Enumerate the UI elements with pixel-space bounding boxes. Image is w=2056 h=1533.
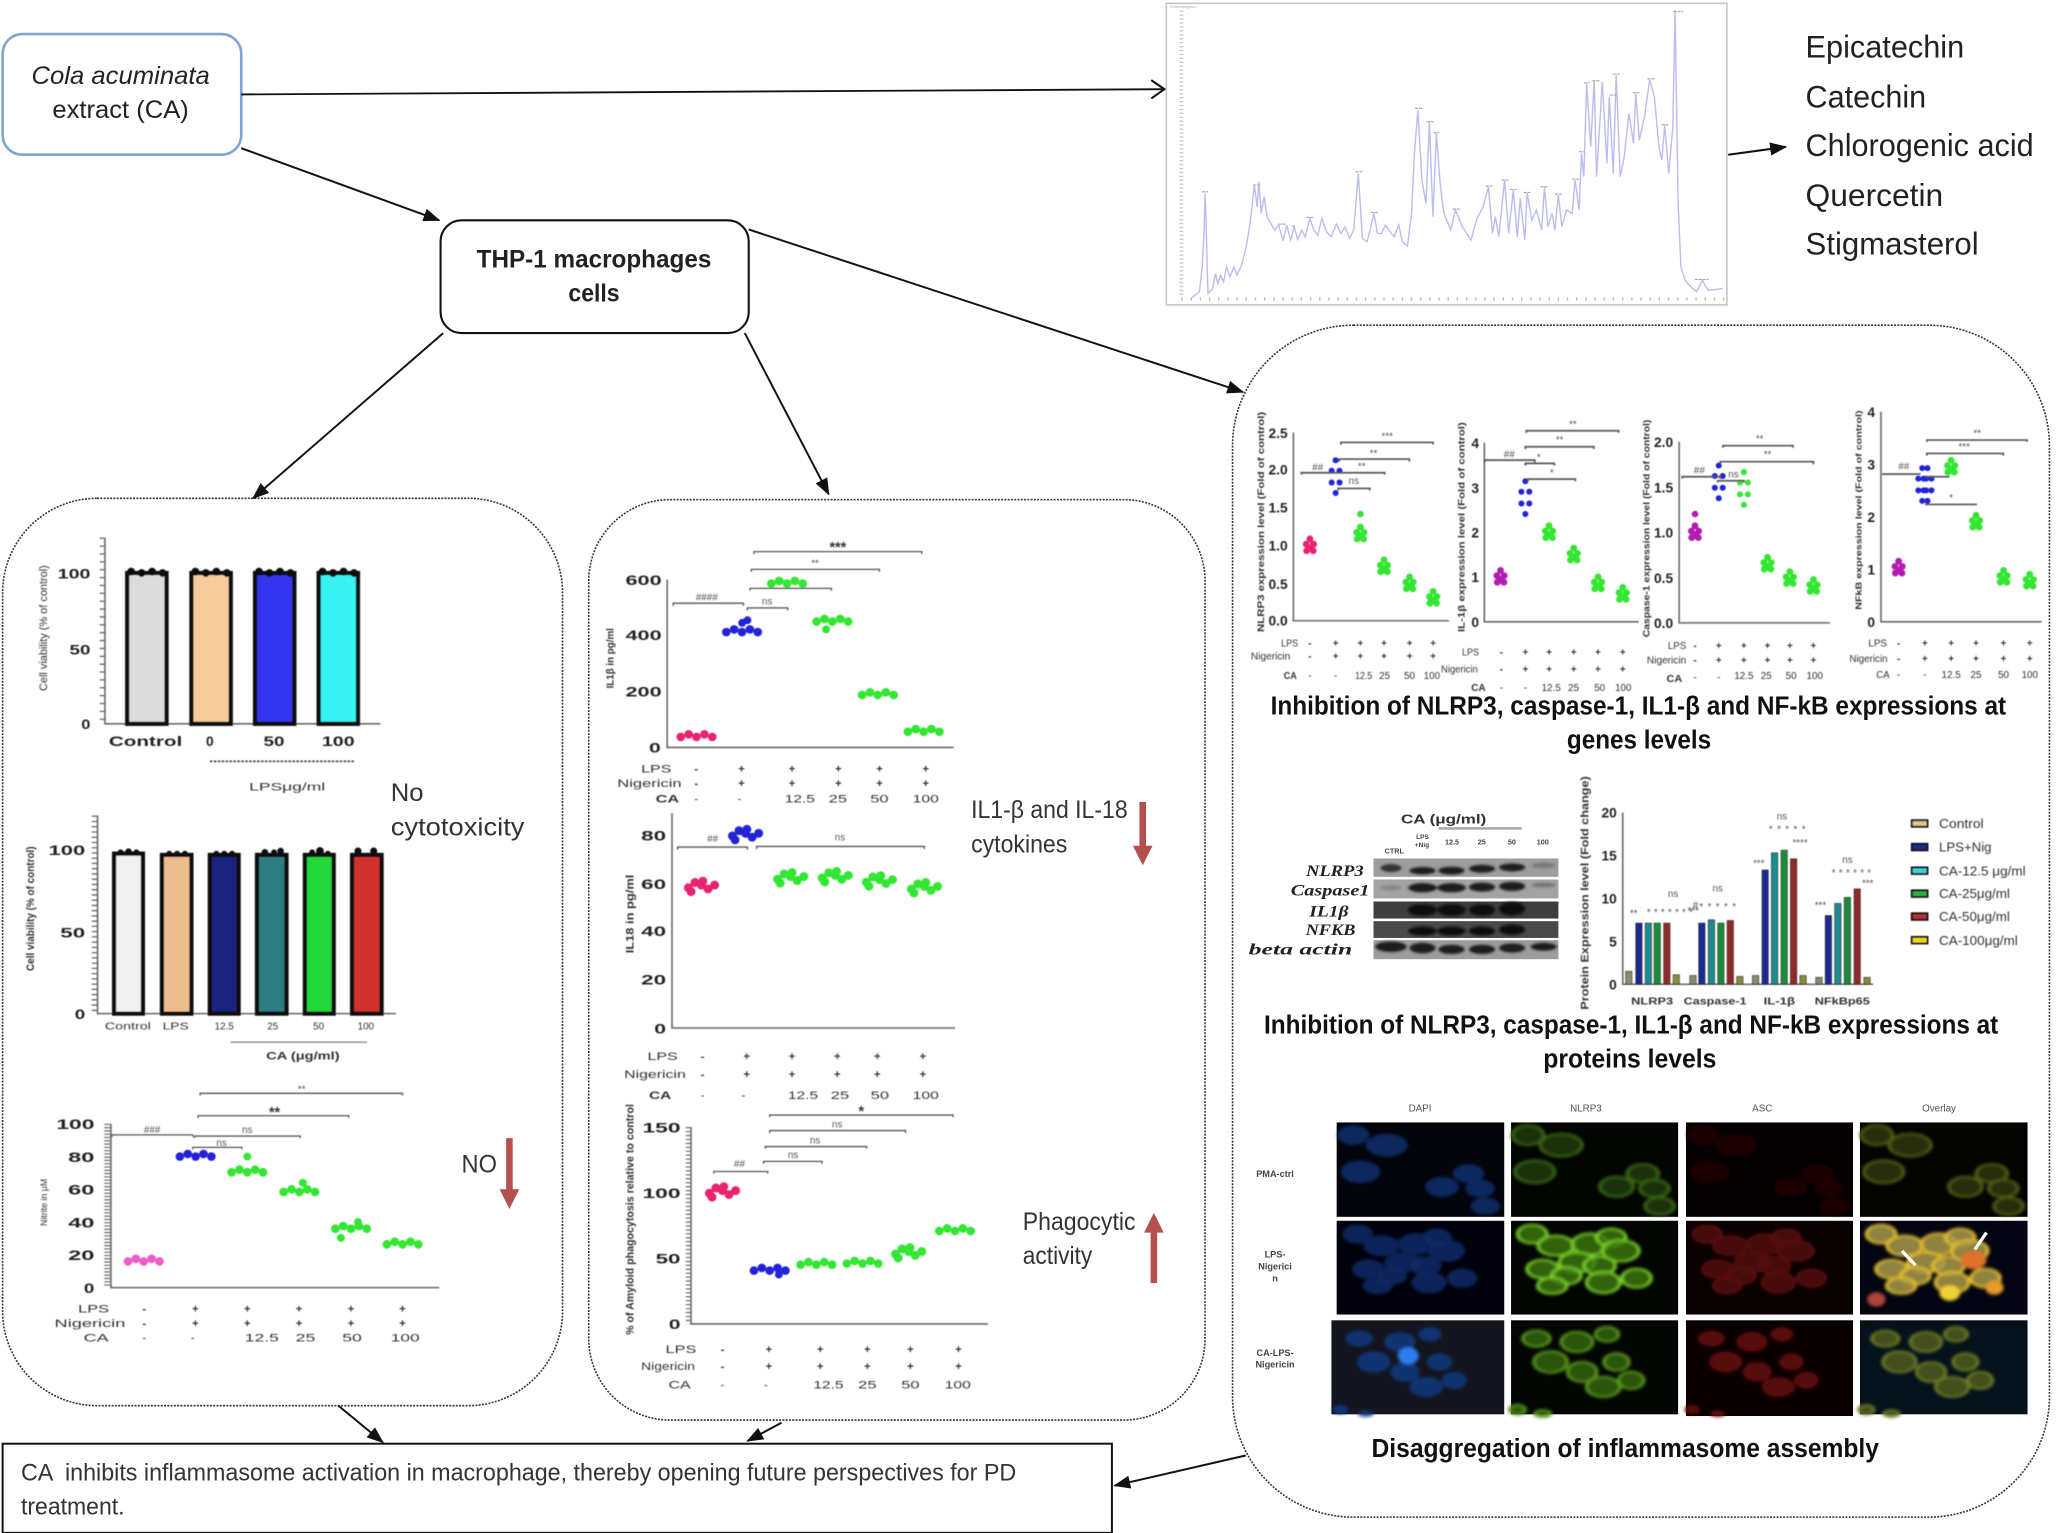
western blot: CTRL (1385, 847, 1404, 856)
chart: IL1 beta: 25 (829, 793, 847, 805)
microscopy grid: Overlay (1922, 1103, 1956, 1114)
chart: nitrite levels: 25 (296, 1332, 315, 1344)
chart: nitrite levels: 20 (68, 1248, 95, 1263)
chart: IL1 beta: CA (656, 793, 679, 805)
chart: NLRP3 gene expression: ## (1312, 463, 1324, 474)
legend: protein bars: CA-12.5 μg/ml (1939, 864, 2026, 878)
chart: protein expression bars: ***** (1769, 825, 1806, 836)
chart: protein expression bars: ****** (1832, 868, 1871, 879)
western blot: NLRP3 (1305, 863, 1364, 880)
label: phagocytic activity: activity (1023, 1242, 1093, 1270)
western blot (1249, 812, 1558, 959)
chart: caspase-1 gene expression: Nigericin (1647, 656, 1686, 667)
chart: amyloid phagocytosis: 12.5 (813, 1380, 844, 1392)
western blot: Caspase1 (1291, 883, 1369, 900)
list: identified compounds (1806, 30, 2034, 261)
chart: caspase-1 gene expression: -- (1693, 673, 1720, 684)
chart: protein expression bars: ******* (1647, 907, 1693, 918)
chart: cell viability with CA: 12.5 (215, 1021, 234, 1032)
chart: amyloid phagocytosis: 50 (901, 1380, 920, 1392)
microscopy grid: PMA-ctrl (1256, 1169, 1294, 1179)
chart: IL-1 beta gene expression: 12.5 (1542, 683, 1561, 694)
label: NO decreased: NO (462, 1150, 497, 1178)
chart: IL-1 beta gene expression: ## (1504, 450, 1515, 461)
chart: NLRP3 gene expression: CA (1284, 671, 1297, 682)
chart: IL1 beta: 200 (625, 684, 662, 699)
chart: cell viability with LPS: 100 (58, 566, 91, 581)
label: phagocytic activity (1023, 1208, 1136, 1270)
chart: NFkB gene expression: 4 (1867, 405, 1875, 420)
chart: amyloid phagocytosis: ns (832, 1120, 842, 1131)
caption: protein levels: proteins levels (1543, 1045, 1716, 1073)
chart: amyloid phagocytosis: 100 (945, 1380, 971, 1392)
caption: gene levels: genes levels (1567, 727, 1711, 755)
chart: IL1 beta: 100 (913, 793, 939, 805)
chart: caspase-1 gene expression: ** (1764, 450, 1772, 461)
chart: protein expression bars: 5 (1609, 934, 1617, 949)
box: THP-1 macrophages cells: cells (568, 280, 620, 308)
chart: caspase-1 gene expression: 25 (1761, 671, 1772, 682)
chart: chromatogram: Chromatogram (1170, 4, 1197, 9)
chart: protein expression bars: 10 (1601, 891, 1617, 906)
panel: cytokines and phagocytosis (589, 500, 1205, 1420)
box: Cola acuminata extract (3, 34, 241, 155)
chart: NFkB gene expression: -+++++ (1897, 638, 2033, 649)
chart: caspase-1 gene expression: 100 (1807, 671, 1823, 682)
caption: protein levels (1264, 1011, 1999, 1073)
microscopy grid (1255, 1103, 2028, 1417)
chart: NLRP3 gene expression: 50 (1404, 671, 1416, 682)
chart: NLRP3 gene expression: 0.0 (1268, 613, 1288, 628)
chart: IL-1 beta gene expression: 100 (1615, 683, 1632, 694)
chart: amyloid phagocytosis: % of Amyloid phagocytosis relative to control (624, 1104, 636, 1335)
microscopy grid: n (1272, 1274, 1278, 1284)
chart: caspase-1 gene expression: 1.5 (1654, 480, 1673, 495)
arrow: macrophages to right panel (749, 229, 1243, 392)
chart: caspase-1 gene expression: ns (1728, 469, 1739, 480)
chart: cell viability with CA: 100 (49, 843, 86, 858)
chart: caspase-1 gene expression: -+++++ (1693, 641, 1817, 652)
microscopy grid: Nigerici (1258, 1261, 1292, 1271)
chart: nitrite levels (39, 1084, 439, 1344)
chart: NLRP3 gene expression: LPS (1281, 638, 1299, 649)
chart: protein expression bars: 20 (1601, 806, 1617, 821)
chart: NFkB gene expression: Nigericin (1849, 654, 1888, 665)
chart: nitrite levels: ns (216, 1138, 227, 1149)
chart: IL18: 0 (654, 1021, 667, 1036)
chart: IL18: ns (835, 833, 845, 844)
chart: IL18: ## (707, 834, 719, 845)
chart: NFkB gene expression: * (1949, 493, 1953, 504)
chart: IL-1 beta gene expression: 2 (1471, 526, 1479, 541)
chart: protein expression bars: NFkBp65 (1815, 996, 1870, 1007)
chart: nitrite levels: -- (142, 1332, 195, 1344)
chart: NLRP3 gene expression: Nigericin (1251, 652, 1290, 663)
western blot: IL1β (1308, 904, 1349, 921)
chart: NLRP3 gene expression: 1.0 (1268, 539, 1288, 554)
chart: IL18: 50 (871, 1090, 889, 1102)
chart: IL1 beta: -+++++ (694, 778, 929, 790)
chart: IL18: IL18 in pg/ml (624, 875, 636, 953)
arrow: macrophages to middle panel (745, 333, 829, 494)
chart: NFkB gene expression: 12.5 (1942, 670, 1961, 681)
chart: amyloid phagocytosis: -+++++ (721, 1344, 962, 1356)
arrow: right panel to conclusion (1115, 1455, 1246, 1486)
chart: NFkB gene expression: 1 (1867, 562, 1875, 577)
label: phagocytic activity: Phagocytic (1023, 1208, 1136, 1236)
chart: IL18: -+++++ (701, 1051, 927, 1063)
chart: nitrite levels: 12.5 (245, 1332, 279, 1344)
chart: protein expression bars: *** (1815, 901, 1826, 912)
label: no cytotoxicity: No (391, 779, 424, 807)
chart: nitrite levels: ns (242, 1125, 253, 1136)
chart: protein expression bars: Caspase-1 (1684, 996, 1747, 1007)
chart: IL-1 beta gene expression (1441, 419, 1639, 694)
chart: NLRP3 gene expression: 25 (1379, 671, 1391, 682)
chart: cell viability with CA (25, 816, 396, 1062)
chart: cell viability with CA: Cell viability (% of control) (25, 846, 37, 971)
arrow: extract to macrophages (241, 148, 439, 220)
chart: protein expression bars: IL-1β (1764, 996, 1795, 1007)
chart: NFkB gene expression: ** (1973, 429, 1981, 440)
chart: protein expression bars: ns (1777, 812, 1787, 823)
label: IL1-beta and IL-18 cytokines: IL1-β and IL-18 (971, 796, 1128, 824)
chart: cell viability with CA: 0 (75, 1007, 86, 1022)
chart: IL18: -- (701, 1090, 746, 1102)
box: conclusion (3, 1444, 1112, 1533)
chart: IL-1 beta gene expression: 50 (1594, 683, 1606, 694)
chart: IL1 beta: -- (694, 793, 742, 805)
chart: caspase-1 gene expression: Caspase-1 expression level (Fold of control) (1642, 420, 1652, 637)
microscopy grid: NLRP3 (1570, 1103, 1602, 1114)
chart: amyloid phagocytosis: 0 (669, 1317, 681, 1332)
chart: amyloid phagocytosis: * (859, 1104, 865, 1120)
chart: IL1 beta: 600 (625, 573, 662, 588)
chart: nitrite levels: Nigericin (55, 1318, 125, 1330)
chart: cell viability with CA: 100 (358, 1021, 375, 1032)
chart: IL18: -+++++ (701, 1069, 927, 1081)
chart: cell viability with LPS: 50 (69, 642, 91, 657)
microscopy grid: LPS- (1265, 1249, 1285, 1259)
label: IL1-beta and IL-18 cytokines (971, 796, 1128, 858)
chart: IL-1 beta gene expression: -+++++ (1500, 648, 1626, 659)
chart: NLRP3 gene expression: 1.5 (1268, 501, 1288, 516)
chart: IL-1 beta gene expression: LPS (1462, 648, 1479, 659)
chart: NLRP3 gene expression: 2.5 (1268, 426, 1288, 441)
panel: cytotoxicity and nitrite (3, 498, 563, 1406)
box: Cola acuminata extract: Cola acuminata (31, 62, 210, 90)
chart: NFkB gene expression: LPS (1868, 638, 1887, 649)
arrow: middle panel to conclusion (747, 1423, 781, 1441)
chart: cell viability with LPS: Control (109, 734, 182, 749)
chart: caspase-1 gene expression: LPS (1668, 641, 1687, 652)
chart: amyloid phagocytosis: 50 (656, 1251, 681, 1266)
chart: protein expression bars (1580, 776, 1874, 1010)
chart: IL1 beta: ns (762, 596, 772, 607)
chart: IL1 beta: -+++++ (694, 763, 929, 775)
chart: NLRP3 gene expression: 2.0 (1268, 463, 1288, 478)
chart: IL-1 beta gene expression: 1 (1471, 570, 1479, 585)
chart: caspase-1 gene expression: ## (1694, 465, 1705, 476)
chart: IL-1 beta gene expression: -+++++ (1500, 665, 1626, 676)
list: identified compounds: Catechin (1806, 80, 1926, 115)
chart: NFkB gene expression: NFkB expression level (Fold of control) (1854, 410, 1864, 610)
chart: NFkB gene expression: -+++++ (1897, 654, 2033, 665)
chart: cell viability with CA: Control (105, 1021, 151, 1032)
legend: protein bars: Control (1939, 817, 1984, 831)
chart: NFkB gene expression: 2 (1867, 510, 1875, 525)
chart: nitrite levels: 60 (68, 1183, 95, 1198)
list: identified compounds: Quercetin (1806, 178, 1943, 213)
label: IL1-beta and IL-18 cytokines: cytokines (971, 830, 1067, 858)
chart: amyloid phagocytosis: ns (810, 1135, 820, 1146)
chart: IL18: 25 (831, 1090, 849, 1102)
chart: IL-1 beta gene expression: IL-1β expression level (Fold of control) (1457, 422, 1467, 632)
chart: cell viability with LPS: 100 (322, 734, 355, 749)
chart: IL1 beta: LPS (641, 763, 671, 775)
list: identified compounds: Epicatechin (1806, 30, 1964, 65)
arrow: left panel to conclusion (338, 1406, 383, 1442)
chart: NLRP3 gene expression: -+++++ (1308, 638, 1436, 649)
chart: NFkB gene expression: *** (1958, 442, 1970, 453)
microscopy grid: CA-LPS- (1256, 1348, 1294, 1358)
box: conclusion: CA inhibits inflammasome activation in macrophage, thereby opening future perspectives for PD (21, 1460, 1016, 1486)
chart: NLRP3 gene expression: 12.5 (1355, 671, 1373, 682)
chart: IL-1 beta gene expression: 4 (1471, 436, 1479, 451)
label: no cytotoxicity: cytotoxicity (391, 813, 525, 841)
chart: IL1 beta: 50 (870, 793, 889, 805)
caption: disaggregation: Disaggregation of inflammasome assembly (1372, 1435, 1880, 1463)
chart: IL1 beta: IL1β in pg/ml (606, 628, 617, 688)
chart: NLRP3 gene expression: *** (1382, 431, 1393, 442)
arrow: extract to chromatogram (241, 89, 1164, 94)
chart: IL1 beta (606, 540, 954, 805)
legend: protein bars: CA-25μg/ml (1939, 887, 2010, 901)
chart: NLRP3 gene expression (1251, 412, 1449, 682)
chart: protein expression bars: # (1693, 901, 1699, 912)
chart: amyloid phagocytosis: 100 (643, 1186, 681, 1201)
western blot: CA (μg/ml) (1401, 812, 1486, 826)
chart: protein expression bars: *** (1862, 878, 1874, 889)
arrow: chromatogram to compounds (1728, 147, 1786, 155)
chart: nitrite levels: -+++++ (142, 1304, 406, 1316)
chart: nitrite levels: Nitrite in μM (39, 1179, 49, 1226)
chart: amyloid phagocytosis: Nigericin (641, 1361, 695, 1373)
chart: NFkB gene expression: 25 (1971, 670, 1982, 681)
chart: IL1 beta: *** (829, 540, 847, 556)
arrow: macrophages to left panel (253, 333, 443, 498)
chart: chromatogram (1166, 3, 1727, 305)
chart: cell viability with CA: 25 (267, 1021, 279, 1032)
chart: NFkB gene expression: 50 (1998, 670, 2010, 681)
western blot: LPS (1416, 834, 1429, 841)
chart: IL18: Nigericin (624, 1069, 686, 1081)
panel: inflammasome expression (1233, 325, 2049, 1517)
chart: protein expression bars: 0 (1609, 977, 1617, 992)
chart: IL-1 beta gene expression: -- (1500, 683, 1527, 694)
chart: amyloid phagocytosis: -+++++ (721, 1361, 962, 1373)
microscopy grid: DAPI (1409, 1103, 1432, 1114)
chart: IL18: 40 (641, 924, 667, 939)
chart: NFkB gene expression: 0 (1867, 615, 1875, 630)
chart: amyloid phagocytosis: CA (668, 1380, 692, 1392)
caption: protein levels: Inhibition of NLRP3, caspase-1, IL1-β and NF-kB expressions at (1264, 1011, 1999, 1039)
chart: amyloid phagocytosis (624, 1104, 988, 1392)
chart: IL-1 beta gene expression: ** (1556, 435, 1564, 446)
chart: nitrite levels: CA (84, 1332, 109, 1344)
chart: cell viability with CA: LPS (163, 1021, 189, 1032)
chart: caspase-1 gene expression: 0.0 (1654, 616, 1673, 631)
chart: IL18: 100 (913, 1090, 939, 1102)
box: Cola acuminata extract: extract (CA) (52, 96, 189, 124)
chart: NLRP3 gene expression: ** (1370, 448, 1378, 459)
chart: amyloid phagocytosis: 25 (858, 1380, 877, 1392)
chart: nitrite levels: LPS (78, 1304, 109, 1316)
box: conclusion: treatment. (21, 1494, 125, 1520)
chart: NFkB gene expression: ## (1898, 461, 1910, 472)
chart: IL-1 beta gene expression: 3 (1471, 481, 1479, 496)
western blot: beta actin (1249, 942, 1352, 959)
chart: nitrite levels: ### (144, 1125, 161, 1136)
western blot: 100 (1537, 837, 1549, 846)
chart: protein expression bars: ns (1842, 855, 1853, 866)
chart: caspase-1 gene expression: CA (1667, 674, 1682, 685)
western blot: 12.5 (1445, 837, 1459, 846)
chart: IL18 (624, 813, 955, 1102)
chart: protein expression bars: NLRP3 (1631, 996, 1674, 1007)
chart: nitrite levels: 80 (68, 1150, 95, 1165)
chart: IL-1 beta gene expression: Nigericin (1441, 665, 1478, 676)
chart: protein expression bars: ** (1630, 909, 1638, 920)
legend: protein bars: CA-50μg/ml (1939, 910, 2010, 924)
chart: IL1 beta: Nigericin (617, 778, 682, 790)
chart: protein expression bars: *** (1688, 906, 1699, 917)
chart: IL1 beta: ** (811, 558, 819, 569)
western blot: NFKB (1304, 922, 1355, 939)
box: THP-1 macrophages cells: THP-1 macrophages (477, 246, 711, 274)
chart: nitrite levels: ** (298, 1084, 306, 1095)
arrow: cytokines down (1133, 802, 1153, 865)
chart: cell viability with LPS: LPSμg/ml (249, 782, 325, 794)
chart: IL-1 beta gene expression: * (1537, 452, 1541, 463)
chart: caspase-1 gene expression: 12.5 (1734, 671, 1754, 682)
chart: nitrite levels: ** (269, 1105, 281, 1121)
chart: protein expression bars: ns (1712, 884, 1723, 895)
chart: caspase-1 gene expression: 0.5 (1654, 571, 1673, 586)
chart: protein expression bars: ns (1668, 889, 1678, 900)
chart: nitrite levels: 100 (56, 1117, 95, 1132)
chart: amyloid phagocytosis: ns (788, 1150, 798, 1161)
chart: cell viability with LPS: 50 (264, 734, 285, 749)
chart: NLRP3 gene expression: NLRP3 expression level (Fold of control) (1256, 412, 1266, 632)
chart: caspase-1 gene expression (1642, 420, 1830, 685)
chart: cell viability with CA: 50 (60, 926, 86, 941)
chart: nitrite levels: 100 (391, 1332, 420, 1344)
chart: NFkB gene expression: -- (1897, 670, 1927, 681)
chart: NLRP3 gene expression: 100 (1424, 671, 1441, 682)
chart: NFkB gene expression: CA (1876, 670, 1890, 681)
chart: cell viability with CA: CA (μg/ml) (266, 1050, 340, 1062)
chart: protein expression bars: Protein Expression level (Fold change) (1580, 776, 1592, 1010)
chart: protein expression bars: *** (1753, 859, 1765, 870)
chart: amyloid phagocytosis: ## (734, 1159, 746, 1170)
chart: IL18: 12.5 (788, 1090, 818, 1102)
box: THP-1 macrophages cells (441, 220, 749, 333)
legend: protein bars: CA-100μg/ml (1939, 934, 2018, 948)
chart: amyloid phagocytosis: LPS (666, 1344, 696, 1356)
western blot: 50 (1508, 837, 1516, 846)
chart: protein expression bars: ***** (1699, 902, 1736, 913)
label: no cytotoxicity (391, 779, 525, 841)
chart: cell viability with LPS: 0 (81, 717, 91, 732)
chart: IL18: CA (649, 1090, 671, 1102)
chart: IL-1 beta gene expression: 25 (1568, 683, 1579, 694)
chart: cell viability with LPS (38, 538, 380, 794)
chart: cell viability with CA: 50 (313, 1021, 325, 1032)
arrow: phagocytic activity up (1144, 1213, 1164, 1283)
chart: IL1 beta: #### (696, 593, 718, 604)
chart: IL18: 20 (641, 973, 667, 988)
chart: IL-1 beta gene expression: CA (1471, 683, 1486, 694)
microscopy grid: Nigericin (1255, 1360, 1295, 1370)
chart: NLRP3 gene expression: -+++++ (1308, 652, 1436, 663)
chart: NLRP3 gene expression: ** (1358, 461, 1366, 472)
chart: IL18: 60 (641, 877, 667, 892)
list: identified compounds: Stigmasterol (1806, 226, 1979, 261)
chart: IL1 beta: 400 (625, 628, 662, 643)
arrow: NO down (500, 1138, 519, 1209)
chart: nitrite levels: -+++++ (142, 1318, 406, 1330)
chart: NLRP3 gene expression: -- (1308, 671, 1337, 682)
chart: cell viability with LPS: 0 (206, 734, 214, 749)
legend: protein bars: LPS+Nig (1939, 841, 1992, 855)
caption: gene levels: Inhibition of NLRP3, caspase-1, IL1-β and NF-kB expressions at (1271, 693, 2007, 721)
chart: IL18: 80 (641, 829, 667, 844)
chart: amyloid phagocytosis: 150 (643, 1120, 681, 1135)
chart: NFkB gene expression: 3 (1867, 457, 1875, 472)
chart: IL18: LPS (647, 1051, 678, 1063)
chart: NLRP3 gene expression: 0.5 (1268, 577, 1288, 592)
chart: protein expression bars: **** (1792, 838, 1808, 849)
chart: NFkB gene expression: 100 (2022, 670, 2039, 681)
chart: nitrite levels: 40 (68, 1215, 95, 1230)
chart: NLRP3 gene expression: ns (1349, 476, 1359, 487)
chart: IL1 beta: 12.5 (785, 793, 815, 805)
chart: IL-1 beta gene expression: * (1550, 468, 1554, 479)
western blot: +Nig (1415, 842, 1429, 849)
caption: gene levels (1271, 693, 2007, 755)
western blot: 25 (1478, 837, 1486, 846)
chart: nitrite levels: 50 (342, 1332, 362, 1344)
list: identified compounds: Chlorogenic acid (1806, 128, 2034, 163)
chart: IL-1 beta gene expression: 0 (1471, 615, 1479, 630)
chart: NFkB gene expression (1849, 405, 2042, 681)
chart: IL-1 beta gene expression: ** (1569, 419, 1577, 430)
chart: caspase-1 gene expression: 2.0 (1654, 435, 1673, 450)
chart: caspase-1 gene expression: 50 (1786, 671, 1797, 682)
legend: protein bars (1912, 817, 2026, 948)
chart: protein expression bars: 15 (1601, 849, 1617, 864)
chart: IL1 beta: 0 (649, 741, 661, 756)
chart: cell viability with LPS: Cell viability (% of control) (38, 565, 50, 691)
chart: amyloid phagocytosis: -- (721, 1380, 768, 1392)
chart: caspase-1 gene expression: -+++++ (1693, 656, 1817, 667)
chart: caspase-1 gene expression: 1.0 (1654, 526, 1673, 541)
chart: caspase-1 gene expression: ** (1756, 434, 1764, 445)
microscopy grid: ASC (1752, 1103, 1772, 1114)
chart: nitrite levels: 0 (84, 1281, 95, 1296)
